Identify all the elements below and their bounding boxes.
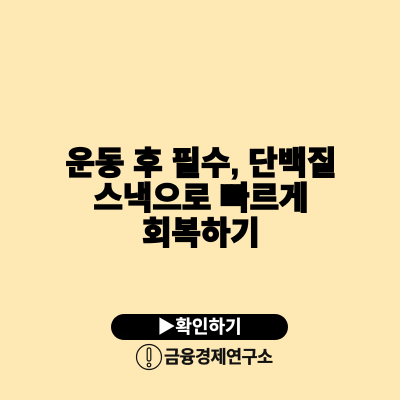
icon: exclamation circle [136, 344, 162, 370]
brand name: 금융경제연구소 [164, 347, 272, 367]
brand: logo and name [136, 344, 273, 370]
title [65, 145, 337, 251]
title: 운동 후 필수, 단백질 [65, 145, 337, 181]
title: 스낵으로 빠르게 [94, 180, 308, 216]
button: confirm [111, 314, 288, 340]
button: confirm: ▶확인하기 [157, 317, 242, 337]
title: 회복하기 [142, 215, 260, 251]
